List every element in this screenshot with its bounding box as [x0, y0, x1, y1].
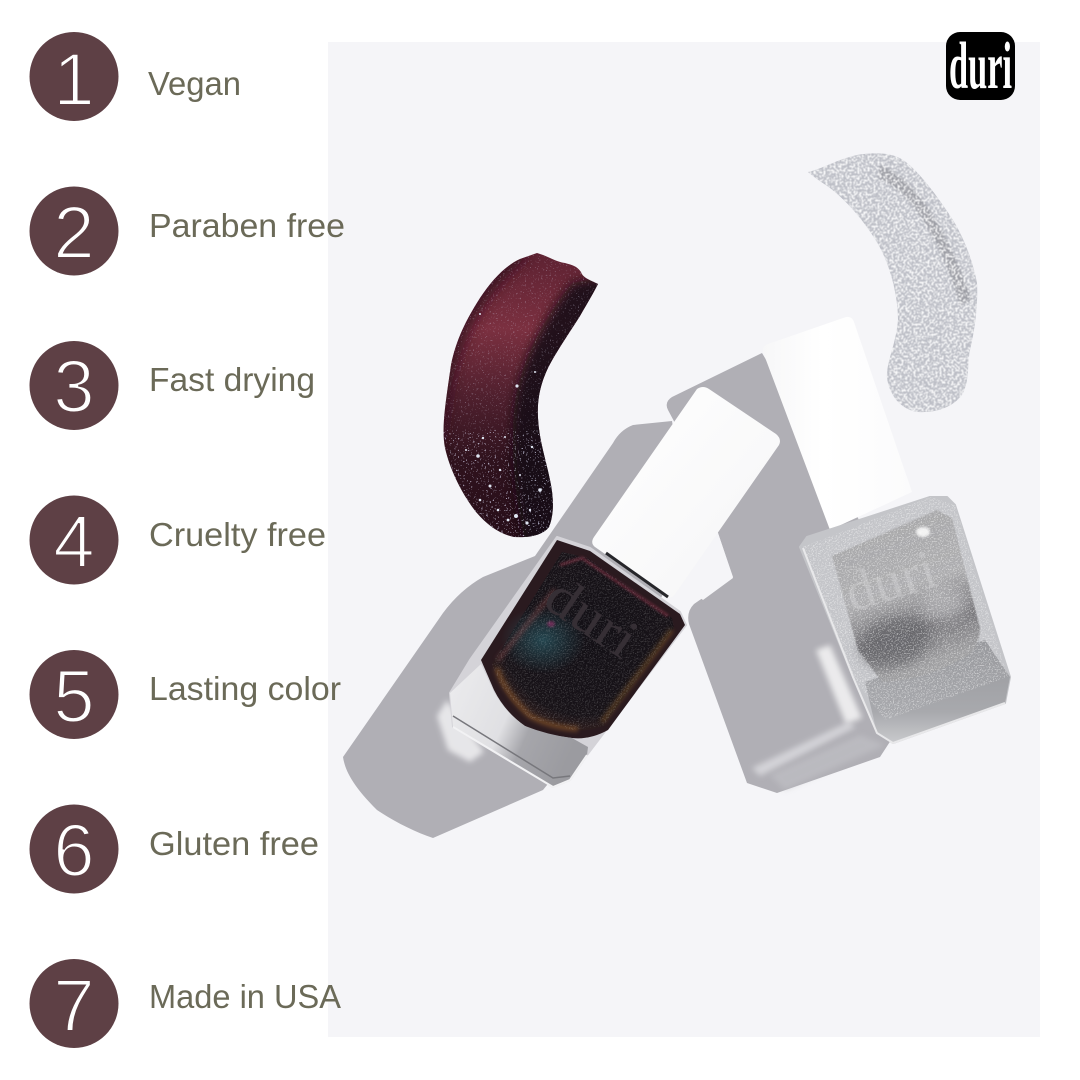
light refraction in right shadow: [752, 645, 885, 790]
item 6: Gluten free: [30, 804, 319, 894]
dark top-left edge: [444, 256, 530, 444]
liquid: [492, 552, 674, 730]
dense glitter lower half: [444, 430, 552, 537]
cap: [592, 387, 780, 598]
sparse glitter: [440, 250, 605, 540]
swatch: silver glitter: [800, 148, 982, 416]
neck: [606, 553, 668, 597]
shadow of left bottle: [343, 421, 690, 838]
liquid: [832, 510, 980, 682]
item 5: Lasting color: 5: [53, 655, 95, 738]
embossed brand: duri: [838, 538, 944, 624]
glass edge highlights: [803, 548, 1005, 743]
item 5: Lasting color: [30, 650, 341, 739]
white gap between shadows: [690, 533, 733, 600]
item 7: Made in USA: Made in USA: [149, 978, 341, 1015]
item 2: Paraben free: 2: [53, 191, 95, 274]
item 2: Paraben free: [30, 186, 345, 276]
item 4: Cruelty free: 4: [53, 500, 95, 583]
cap: [763, 317, 912, 530]
item 7: Made in USA: [30, 959, 341, 1048]
dark rim: [481, 540, 685, 738]
light refraction in left shadow: [437, 700, 484, 762]
left bottle: [450, 387, 780, 787]
shadow of right bottle: [667, 353, 930, 793]
item 4: Cruelty free: [30, 496, 326, 584]
photo panel: [328, 42, 1040, 1037]
item 3: Fast drying: Fast drying: [149, 361, 315, 398]
glass base: [865, 640, 1010, 743]
dark band along inner edge: [513, 275, 610, 545]
base edge: [453, 716, 570, 778]
item 1: Vegan: [30, 32, 241, 121]
item 1: Vegan: Vegan: [148, 65, 241, 102]
item 6: Gluten free: 6: [53, 809, 95, 892]
clear base: [450, 664, 588, 787]
iridescent sheen: [501, 606, 585, 674]
item 7: Made in USA: 7: [53, 964, 95, 1047]
item 1: Vegan: 1: [53, 38, 95, 121]
darker band: [878, 165, 972, 305]
logo: duri: duri: [949, 29, 1012, 103]
item 4: Cruelty free: Cruelty free: [149, 516, 326, 553]
item 3: Fast drying: 3: [53, 345, 95, 428]
item 2: Paraben free: Paraben free: [149, 207, 345, 244]
glass body: [800, 497, 1010, 743]
glitter: [809, 153, 977, 412]
item 3: Fast drying: [30, 341, 315, 430]
right bottle: [763, 317, 1010, 743]
glass body: [450, 537, 686, 787]
embossed brand: duri: [534, 564, 650, 671]
swatch: burgundy polish: [444, 253, 598, 538]
logo: duri: [946, 29, 1015, 103]
item 5: Lasting color: Lasting color: [149, 670, 341, 707]
bright sparkles: [465, 313, 542, 525]
item 6: Gluten free: Gluten free: [149, 825, 319, 862]
